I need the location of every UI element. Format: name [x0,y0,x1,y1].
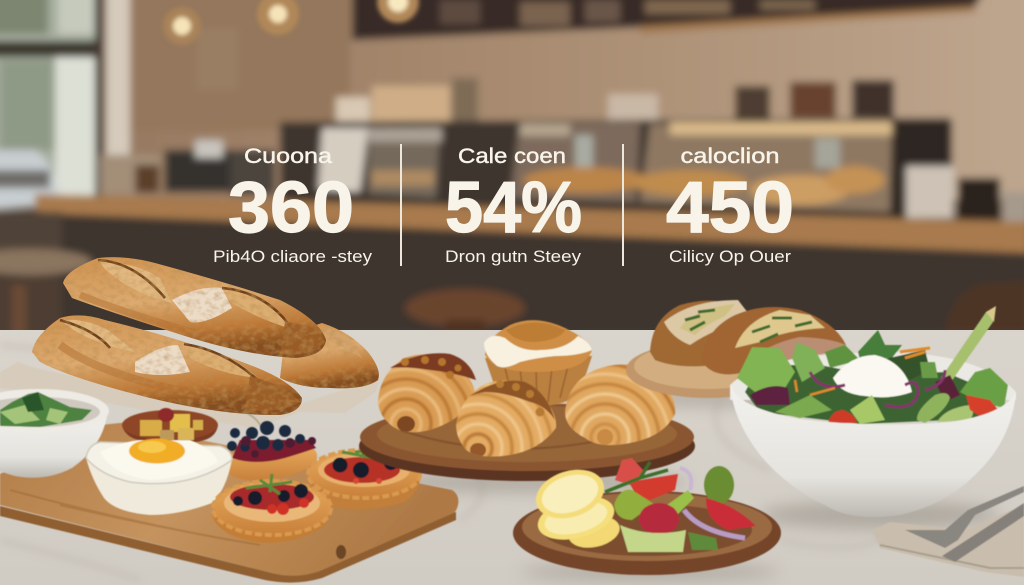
divider left [400,144,402,266]
glass dish with egg and cream [86,438,232,515]
ramekin with diced fruit [122,408,218,442]
croissant middle [456,380,557,458]
croissant right [564,364,676,446]
right jam tart [308,446,420,509]
stat 2: Cale coen 54%: Cale coen [458,145,566,168]
large white salad bowl [730,306,1016,517]
blueberry tart [225,421,317,480]
stat 1: Cuoona 360: Pib4O cliaore -stey [213,248,373,266]
stat panel: three metrics [213,144,794,266]
right napkin with fork and knife [872,486,1024,577]
stat 1: Cuoona 360: 360 [228,168,354,248]
stat 1: Cuoona 360 [213,145,373,266]
plate with stuffed breads [626,300,846,398]
bowl back rim [730,352,1016,400]
stat 3: caloclion 450: Cilicy Op Ouer [669,248,792,266]
stat 1: Cuoona 360: Cuoona [244,145,332,168]
round wooden board [359,403,695,481]
bread: baguette lower [32,315,302,415]
table top [0,330,1024,585]
small salad bowl [0,389,109,478]
bread: baguette top [63,257,326,358]
front jam tart [212,474,332,543]
salad contents [737,306,1008,424]
bread: baguette back [280,323,379,388]
stat 3: caloclion 450 [666,145,794,266]
stat 3: caloclion 450: caloclion [680,145,780,168]
cutting board [0,422,458,583]
cream pastry in cup [484,320,592,406]
stat 2: Cale coen 54%: 54% [445,168,582,248]
divider right [622,144,624,266]
stat 2: Cale coen 54%: Dron gutn Steey [445,248,582,266]
croissant left [378,352,476,433]
warm lamps [163,0,419,45]
napkin under bread [0,362,380,428]
stat 3: caloclion 450: 450 [666,168,794,248]
side plate with lemon and salad [513,458,781,575]
soft shadows on table [370,390,1000,580]
stat 2: Cale coen 54% [445,145,582,266]
bowl body [730,385,1016,517]
